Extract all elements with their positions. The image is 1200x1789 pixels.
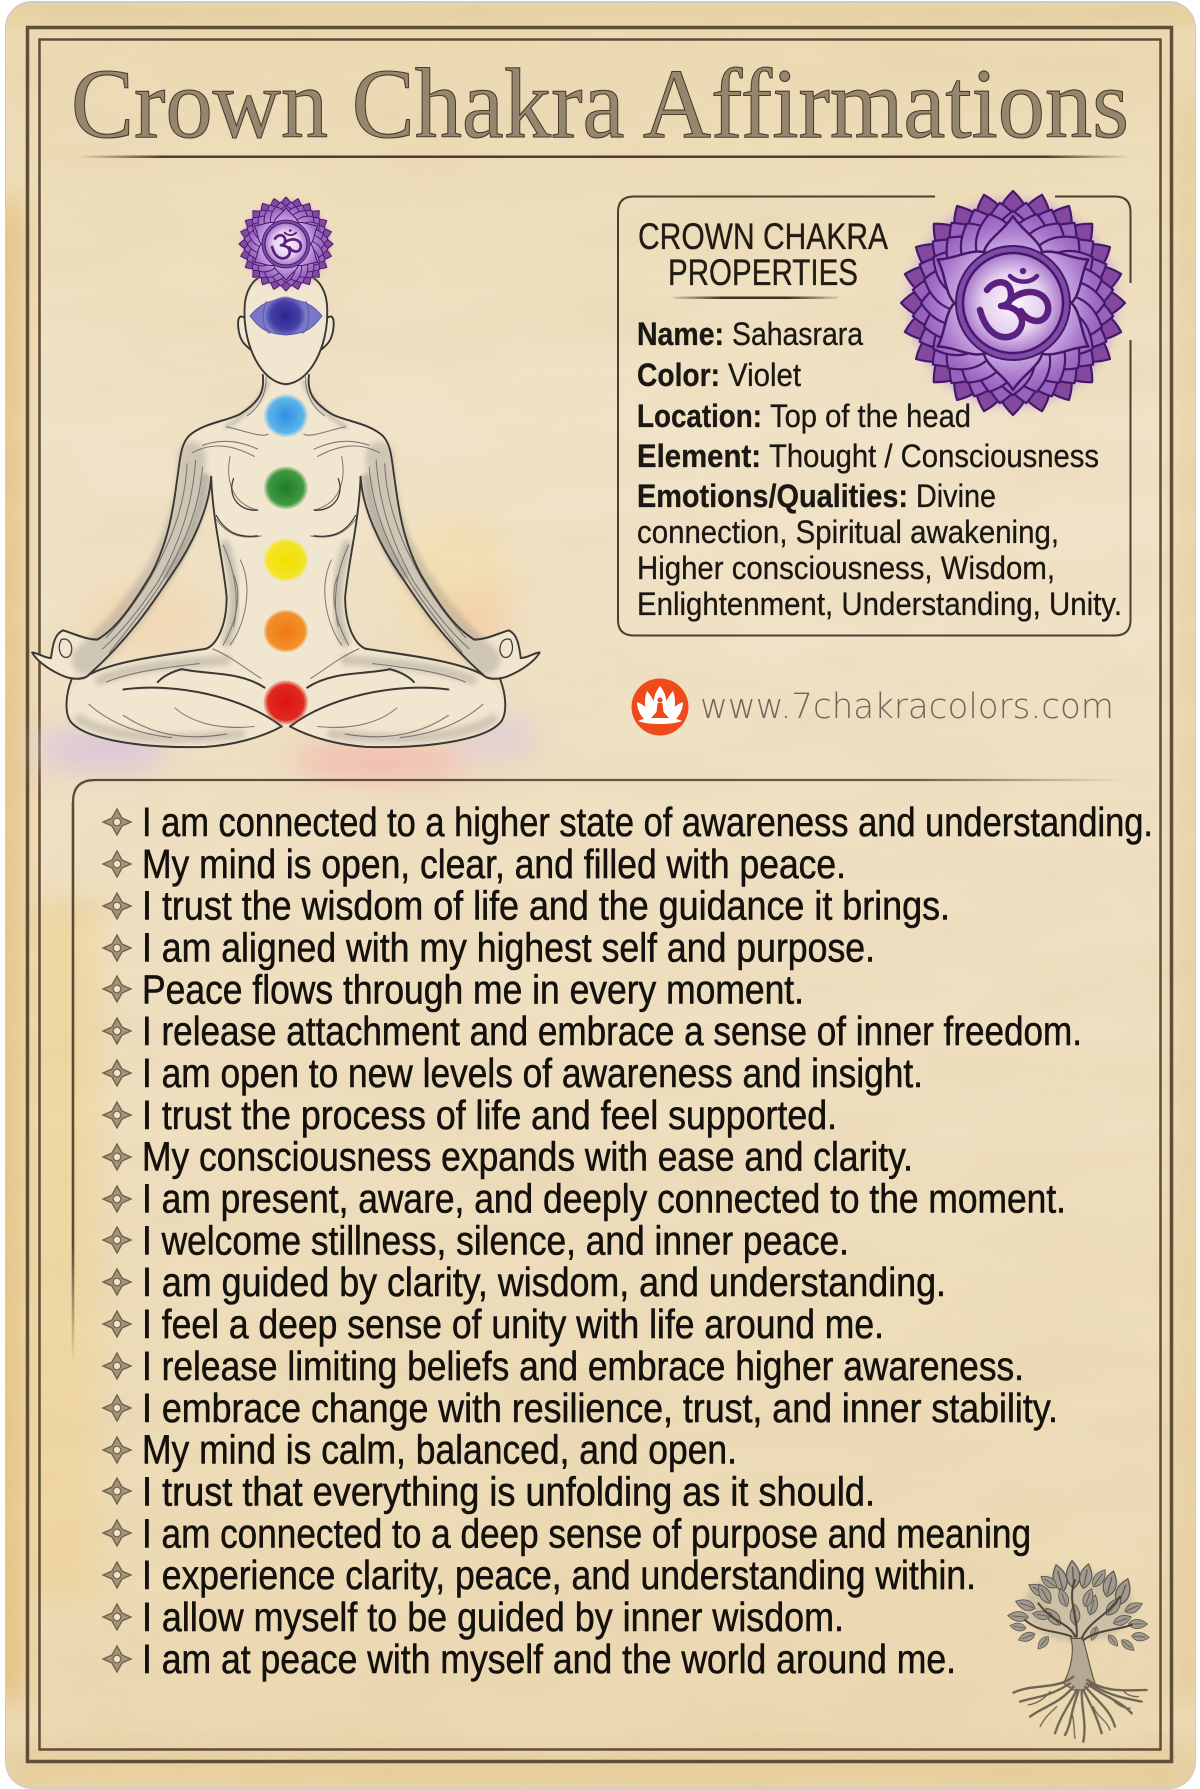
solar plexus chakra <box>263 539 308 581</box>
watercolor wash <box>34 519 540 778</box>
root chakra <box>263 680 308 725</box>
affirmations list: I embrace change with resilience, trust, and inner stability. <box>142 1385 1058 1431</box>
affirmations list: I am aligned with my highest self and purpose. <box>142 924 875 970</box>
properties text: Emotions/Qualities: <box>637 478 908 514</box>
tree trunk and branches <box>1063 1638 1095 1690</box>
properties text: Higher consciousness, Wisdom, <box>637 550 1055 586</box>
affirmations list: My mind is open, clear, and filled with peace. <box>142 841 846 887</box>
affirmations list: I trust that everything is unfolding as it should. <box>142 1468 875 1514</box>
affirmations list: My consciousness expands with ease and clarity. <box>142 1134 913 1180</box>
properties text: Divine <box>916 478 996 514</box>
affirmations list: I trust the process of life and feel supported. <box>142 1092 837 1138</box>
affirmations panel outline <box>73 780 1124 1362</box>
affirmations list: I am open to new levels of awareness and insight. <box>142 1050 923 1096</box>
panel outline <box>618 196 1130 636</box>
throat chakra <box>264 394 308 437</box>
properties text: Element: <box>637 438 761 474</box>
properties panel <box>618 196 1130 636</box>
third eye chakra <box>250 297 322 335</box>
icon: tree of life <box>1007 1560 1150 1742</box>
sacral chakra <box>263 610 308 652</box>
affirmations list: I am connected to a deep sense of purpose and meaning <box>142 1510 1031 1556</box>
small crown chakra mandala <box>238 196 334 292</box>
properties text: connection, Spiritual awakening, <box>637 514 1059 550</box>
meditating figure with chakras <box>32 277 540 778</box>
affirmations list: I am present, aware, and deeply connected to the moment. <box>142 1176 1066 1222</box>
panel heading <box>638 216 888 293</box>
bullets <box>103 809 131 1672</box>
title underline <box>78 156 1130 158</box>
affirmations list: I trust the wisdom of life and the guidance it brings. <box>142 883 950 929</box>
properties text: Name: <box>637 316 724 352</box>
affirmations list <box>142 799 1153 1682</box>
affirmations list: I am guided by clarity, wisdom, and understanding. <box>142 1259 946 1305</box>
properties text: Location: <box>637 398 762 434</box>
affirmations list: I release limiting beliefs and embrace higher awareness. <box>142 1343 1024 1389</box>
properties text <box>637 316 1122 622</box>
body, mirrored halves <box>32 277 540 747</box>
affirmations list: I feel a deep sense of unity with life around me. <box>142 1301 884 1347</box>
properties text: Top of the head <box>770 398 971 434</box>
website url: www.7chakracolors.com <box>700 687 1114 727</box>
properties text: Thought / Consciousness <box>769 438 1099 474</box>
panel heading rule <box>673 296 838 299</box>
logo: lotus badge <box>632 678 688 736</box>
properties text: Sahasrara <box>732 316 863 352</box>
affirmations list: Peace flows through me in every moment. <box>142 966 804 1012</box>
heart chakra <box>264 466 308 509</box>
large crown chakra mandala <box>898 188 1128 418</box>
properties text: Violet <box>728 357 801 393</box>
canopy shade <box>1023 1572 1133 1642</box>
affirmations list: I allow myself to be guided by inner wisdom. <box>142 1594 844 1640</box>
properties text: Enlightenment, Understanding, Unity. <box>637 586 1122 622</box>
properties text: Color: <box>637 357 720 393</box>
title: Crown Chakra Affirmations <box>71 48 1129 159</box>
affirmations list: My mind is calm, balanced, and open. <box>142 1427 737 1473</box>
tree canopy leaves <box>1007 1560 1150 1653</box>
panel heading: CROWN CHAKRA <box>638 216 888 257</box>
tree roots <box>1013 1677 1147 1742</box>
affirmations list: I welcome stillness, silence, and inner peace. <box>142 1217 849 1263</box>
affirmations list: I am at peace with myself and the world around me. <box>142 1636 956 1682</box>
panel heading: PROPERTIES <box>668 252 858 293</box>
affirmations list: I experience clarity, peace, and understanding within. <box>142 1552 976 1598</box>
